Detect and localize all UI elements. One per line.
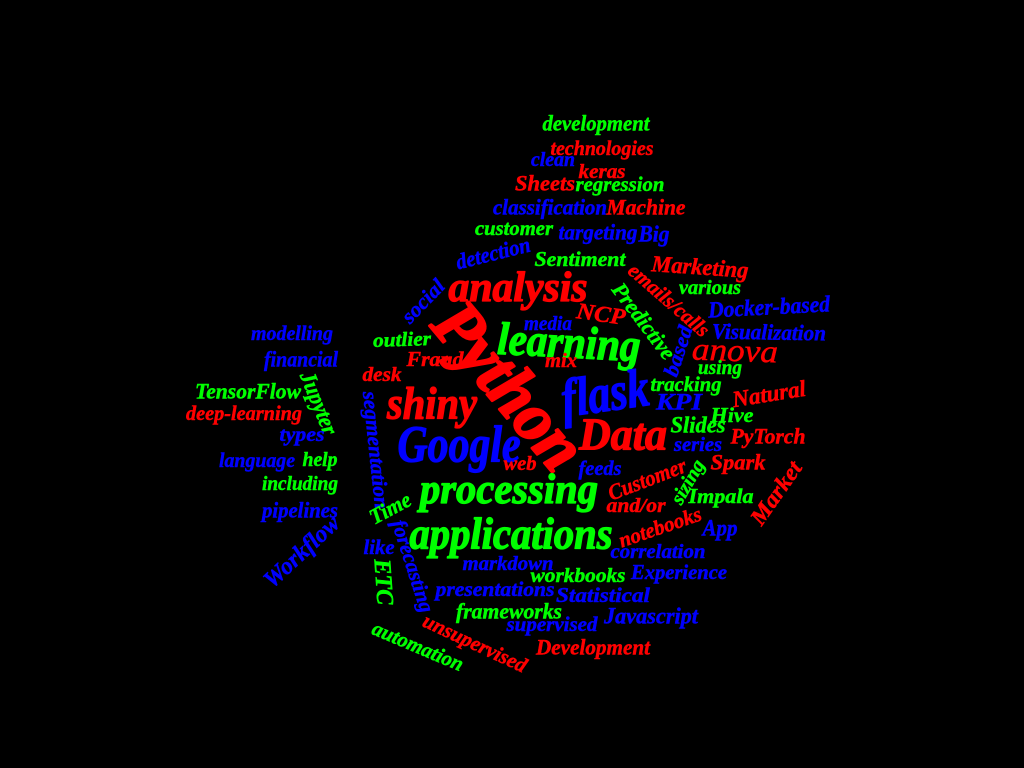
word: Spark: Spark	[710, 450, 766, 474]
word: and/or: and/or	[607, 495, 666, 517]
word: Visualization: Visualization	[712, 319, 826, 345]
word: Big: Big	[638, 222, 670, 246]
word: using: using	[698, 357, 742, 379]
word: development: development	[542, 110, 650, 136]
word: Slides: Slides	[670, 412, 726, 438]
word: presentations: presentations	[433, 577, 554, 601]
word: automation: automation	[369, 616, 467, 676]
word: Jupyter: Jupyter	[295, 367, 343, 439]
word: learning: learning	[496, 313, 642, 371]
word: keras: keras	[578, 161, 626, 183]
word: help: help	[302, 449, 338, 471]
word: customer: customer	[475, 216, 554, 240]
word: emails/calls: emails/calls	[623, 258, 715, 342]
word: unsupervised: unsupervised	[419, 608, 531, 678]
word: Time: Time	[365, 487, 415, 529]
word: social: social	[396, 274, 450, 329]
word: supervised: supervised	[506, 612, 598, 636]
word: correlation: correlation	[610, 541, 706, 563]
word: clean: clean	[531, 149, 575, 171]
word: TensorFlow: TensorFlow	[195, 378, 301, 404]
word: tracking: tracking	[650, 372, 722, 396]
word: Impala: Impala	[687, 484, 754, 508]
word: Javascript: Javascript	[603, 604, 699, 628]
word: detection: detection	[453, 232, 533, 274]
word: mix: mix	[545, 350, 577, 372]
word: workbooks: workbooks	[530, 565, 626, 587]
word: Hive: Hive	[709, 403, 754, 427]
word: Data: Data	[578, 408, 667, 460]
word: like: like	[364, 535, 394, 559]
word: Sheets: Sheets	[515, 170, 575, 196]
word: frameworks: frameworks	[456, 598, 562, 624]
word: flask: flask	[557, 357, 653, 429]
word: deep-learning: deep-learning	[186, 401, 302, 425]
word: KPI: KPI	[655, 390, 703, 414]
word: forecasting: forecasting	[387, 517, 439, 615]
word: analysis: analysis	[448, 265, 588, 311]
word: media: media	[524, 313, 572, 335]
word: Python: Python	[416, 286, 601, 485]
word: NCP: NCP	[574, 298, 628, 330]
word: series: series	[673, 434, 722, 456]
word: outlier: outlier	[373, 328, 432, 352]
word: language: language	[219, 448, 295, 472]
word: segmentation: segmentation	[358, 389, 394, 510]
word: notebooks: notebooks	[615, 502, 705, 552]
word: various: various	[679, 277, 741, 299]
word: Marketing: Marketing	[650, 251, 749, 283]
word: Docker-based: Docker-based	[706, 291, 831, 323]
word: ETC: ETC	[368, 557, 398, 607]
word: Statistical: Statistical	[556, 583, 650, 607]
word: pipelines: pipelines	[260, 498, 338, 522]
word: PyTorch: PyTorch	[730, 424, 806, 448]
word: Development: Development	[535, 634, 651, 660]
word: markdown: markdown	[462, 553, 554, 575]
word: Predictive: Predictive	[606, 277, 681, 365]
word: processing: processing	[417, 467, 598, 513]
word: web: web	[504, 453, 536, 475]
word: applications: applications	[410, 510, 612, 558]
word: Market: Market	[745, 456, 807, 531]
word: Experience: Experience	[630, 560, 727, 584]
word: modelling: modelling	[251, 321, 333, 345]
word: sizing: sizing	[666, 456, 710, 509]
word: Fraud: Fraud	[405, 347, 464, 371]
word: anova: anova	[691, 331, 779, 369]
word: Natural: Natural	[730, 376, 808, 412]
word: technologies: technologies	[550, 136, 654, 160]
word: based: based	[659, 322, 698, 379]
word: shiny: shiny	[386, 378, 478, 428]
word: including: including	[262, 473, 338, 495]
word: targeting: targeting	[558, 220, 638, 244]
word: regression: regression	[576, 172, 664, 196]
word: Workflow: Workflow	[259, 510, 346, 594]
word: types: types	[280, 424, 325, 446]
word: financial: financial	[264, 346, 339, 372]
word: App: App	[701, 516, 738, 540]
word: classification: classification	[493, 194, 607, 220]
word: Google: Google	[398, 416, 520, 474]
word: Sentiment: Sentiment	[534, 247, 627, 271]
word: Customer: Customer	[604, 452, 690, 505]
word: feeds: feeds	[578, 456, 622, 480]
word: Machine: Machine	[606, 194, 686, 220]
word: desk: desk	[362, 364, 402, 386]
